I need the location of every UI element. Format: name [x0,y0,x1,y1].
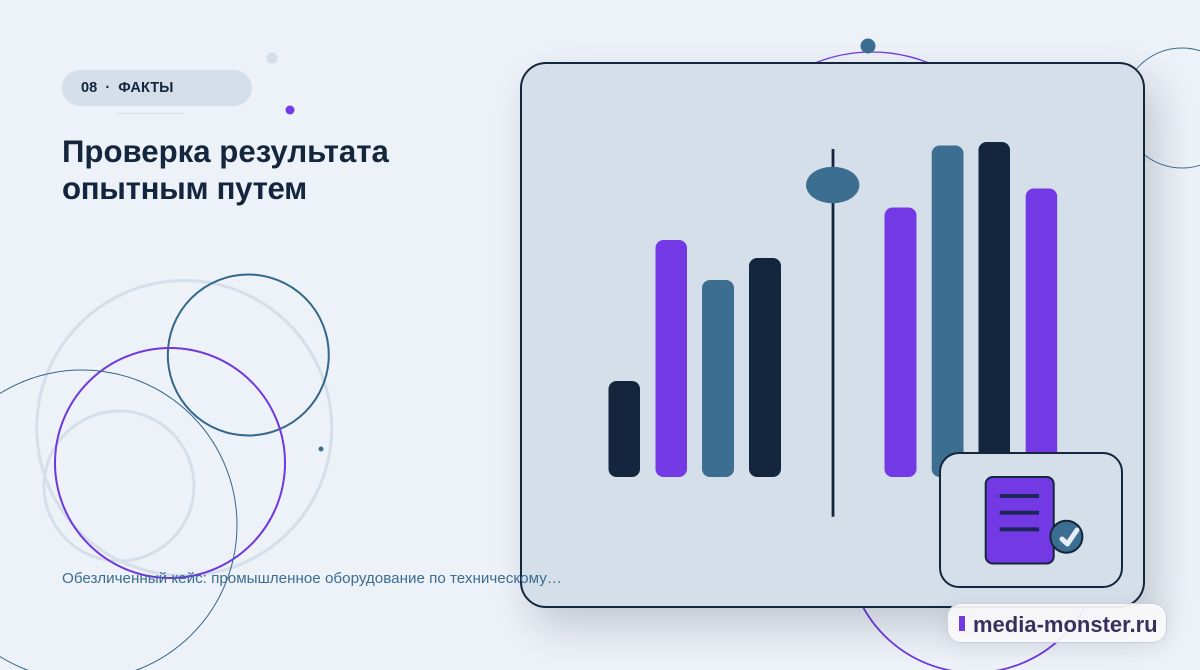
caption: Обезличенный кейс: промышленное оборудование по техническому… [62,570,562,587]
badge: section label: 08 · ФАКТЫ [81,80,173,96]
icon: accent bar [959,616,965,631]
watermark text: media-monster.ru [973,612,1158,637]
title: опытным путем [62,171,307,206]
watermark: site name [947,603,1167,643]
icon: document with check mark [984,476,1084,564]
title: Проверка результата [62,134,389,169]
panel: chart card [520,62,1145,608]
badge: section label [62,70,252,106]
title [62,134,390,206]
inset card: verified document [939,452,1123,588]
